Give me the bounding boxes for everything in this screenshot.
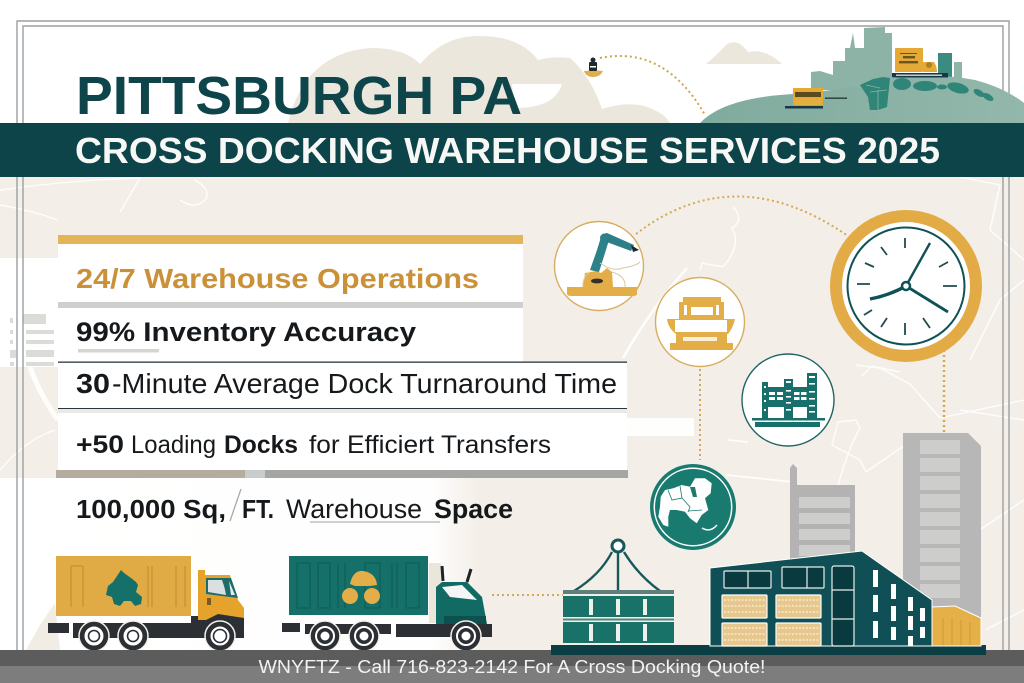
stats panel <box>56 235 694 524</box>
dotted connectors <box>492 196 944 595</box>
title: PITTSBURGH PA <box>76 66 522 126</box>
pittsburgh skyline and hill <box>700 27 1024 123</box>
warehouse building <box>710 551 932 646</box>
stat: loading docks: Docks <box>224 431 298 459</box>
icon: teal buildings circle <box>742 354 834 446</box>
stat: warehouse space <box>76 489 513 524</box>
faint wedge behind truck <box>26 603 60 650</box>
stat: loading docks: Loading <box>131 431 216 459</box>
footer caption: WNYFTZ - Call 716-823-2142 For A Cross Docking Quote! <box>258 657 766 677</box>
stat: warehouse space: Space <box>434 494 513 524</box>
cargo container and crane <box>563 540 674 643</box>
grey building left <box>790 464 855 600</box>
clock hands <box>870 243 948 312</box>
stat: dock turnaround: 30 <box>76 368 110 399</box>
gold crate <box>932 606 981 646</box>
subtitle text: CROSS DOCKING WAREHOUSE SERVICES 2025 <box>75 130 940 171</box>
footer bar <box>0 650 1024 683</box>
stat: warehouse space: FT. <box>242 494 274 524</box>
truck: gold <box>48 556 244 651</box>
icon: globe circle <box>650 464 736 550</box>
icon: clock <box>830 210 982 362</box>
stat: loading docks: +50 <box>76 431 124 459</box>
truck: teal <box>282 556 492 651</box>
stat: warehouse space: Warehouse <box>286 494 422 524</box>
subtitle banner <box>0 123 1024 177</box>
faint building pattern <box>10 314 54 366</box>
icon: location marker <box>584 58 603 77</box>
clock ticks <box>857 238 957 335</box>
stat: 24/7 operations: 24/7 Warehouse Operations <box>76 263 479 294</box>
stat: inventory accuracy: 99% Inventory Accuracy <box>76 317 416 347</box>
icon: robotic arm circle <box>554 222 644 310</box>
grey building right <box>903 433 981 650</box>
dock platform <box>551 645 986 655</box>
stat: dock turnaround: -Minute Average Dock Turnaround Time <box>112 368 617 399</box>
stat: loading docks <box>76 431 551 459</box>
stat: warehouse space: 100,000 Sq, <box>76 494 226 524</box>
dotted route arc <box>600 56 705 115</box>
small yellow truck <box>785 88 847 108</box>
white cut behind title <box>512 84 562 108</box>
header beige clouds <box>288 36 670 123</box>
large yellow truck <box>892 48 948 78</box>
icon: warehouse console circle <box>656 278 744 366</box>
stat: loading docks: for Efficiert Transfers <box>309 431 551 459</box>
teal patchwork map <box>860 77 995 110</box>
small beige cloud <box>706 42 782 64</box>
